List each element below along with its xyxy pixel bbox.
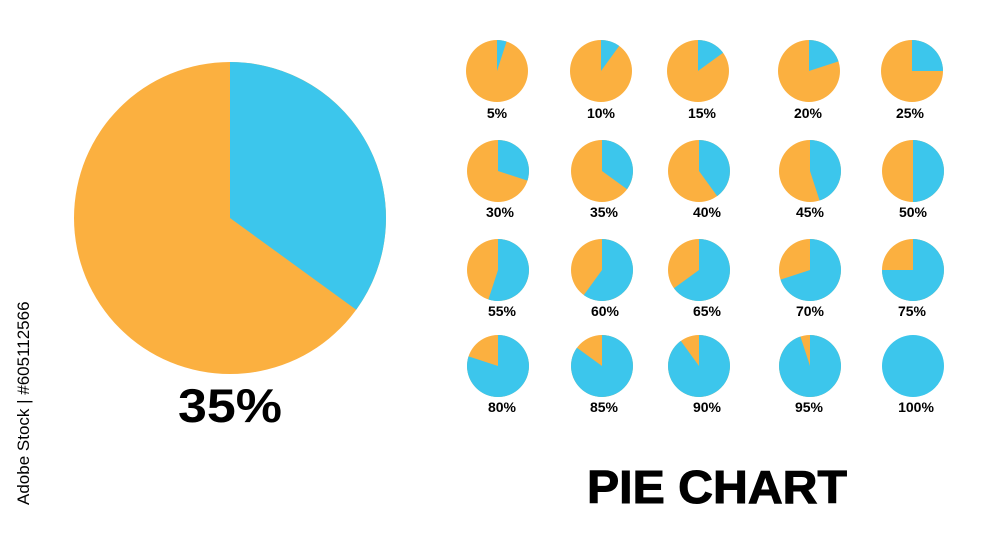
row 2 [467, 140, 944, 220]
row 2: 40% [693, 204, 722, 220]
row 4: 90% [693, 399, 722, 415]
row 1: 5% [487, 105, 508, 121]
row 2: 35% [590, 204, 619, 220]
row 1 [466, 40, 943, 121]
row 3: 65% [693, 303, 722, 319]
row 4: 100% [898, 399, 934, 415]
vertical stock id text: Adobe Stock | #605112566 [14, 301, 33, 505]
row 1: 15% [688, 105, 717, 121]
big pie chart 35% [74, 62, 386, 374]
row 2: 30% [486, 204, 515, 220]
row 2: 45% [796, 204, 825, 220]
row 1: 10% [587, 105, 616, 121]
row 1: 20% [794, 105, 823, 121]
row 4: 80% [488, 399, 517, 415]
row 3: 55% [488, 303, 517, 319]
title PIE CHART: PIE CHART [587, 461, 847, 513]
row 3: 60% [591, 303, 620, 319]
row 4: 85% [590, 399, 619, 415]
row 3: 75% [898, 303, 927, 319]
big label 35%: 35% [178, 379, 282, 432]
row 1: 25% [896, 105, 925, 121]
grid of small pies [466, 40, 944, 415]
row 3 [467, 239, 944, 319]
row 3: 70% [796, 303, 825, 319]
row 2: 50% [899, 204, 928, 220]
row 4 [467, 335, 944, 415]
row 4: 95% [795, 399, 824, 415]
